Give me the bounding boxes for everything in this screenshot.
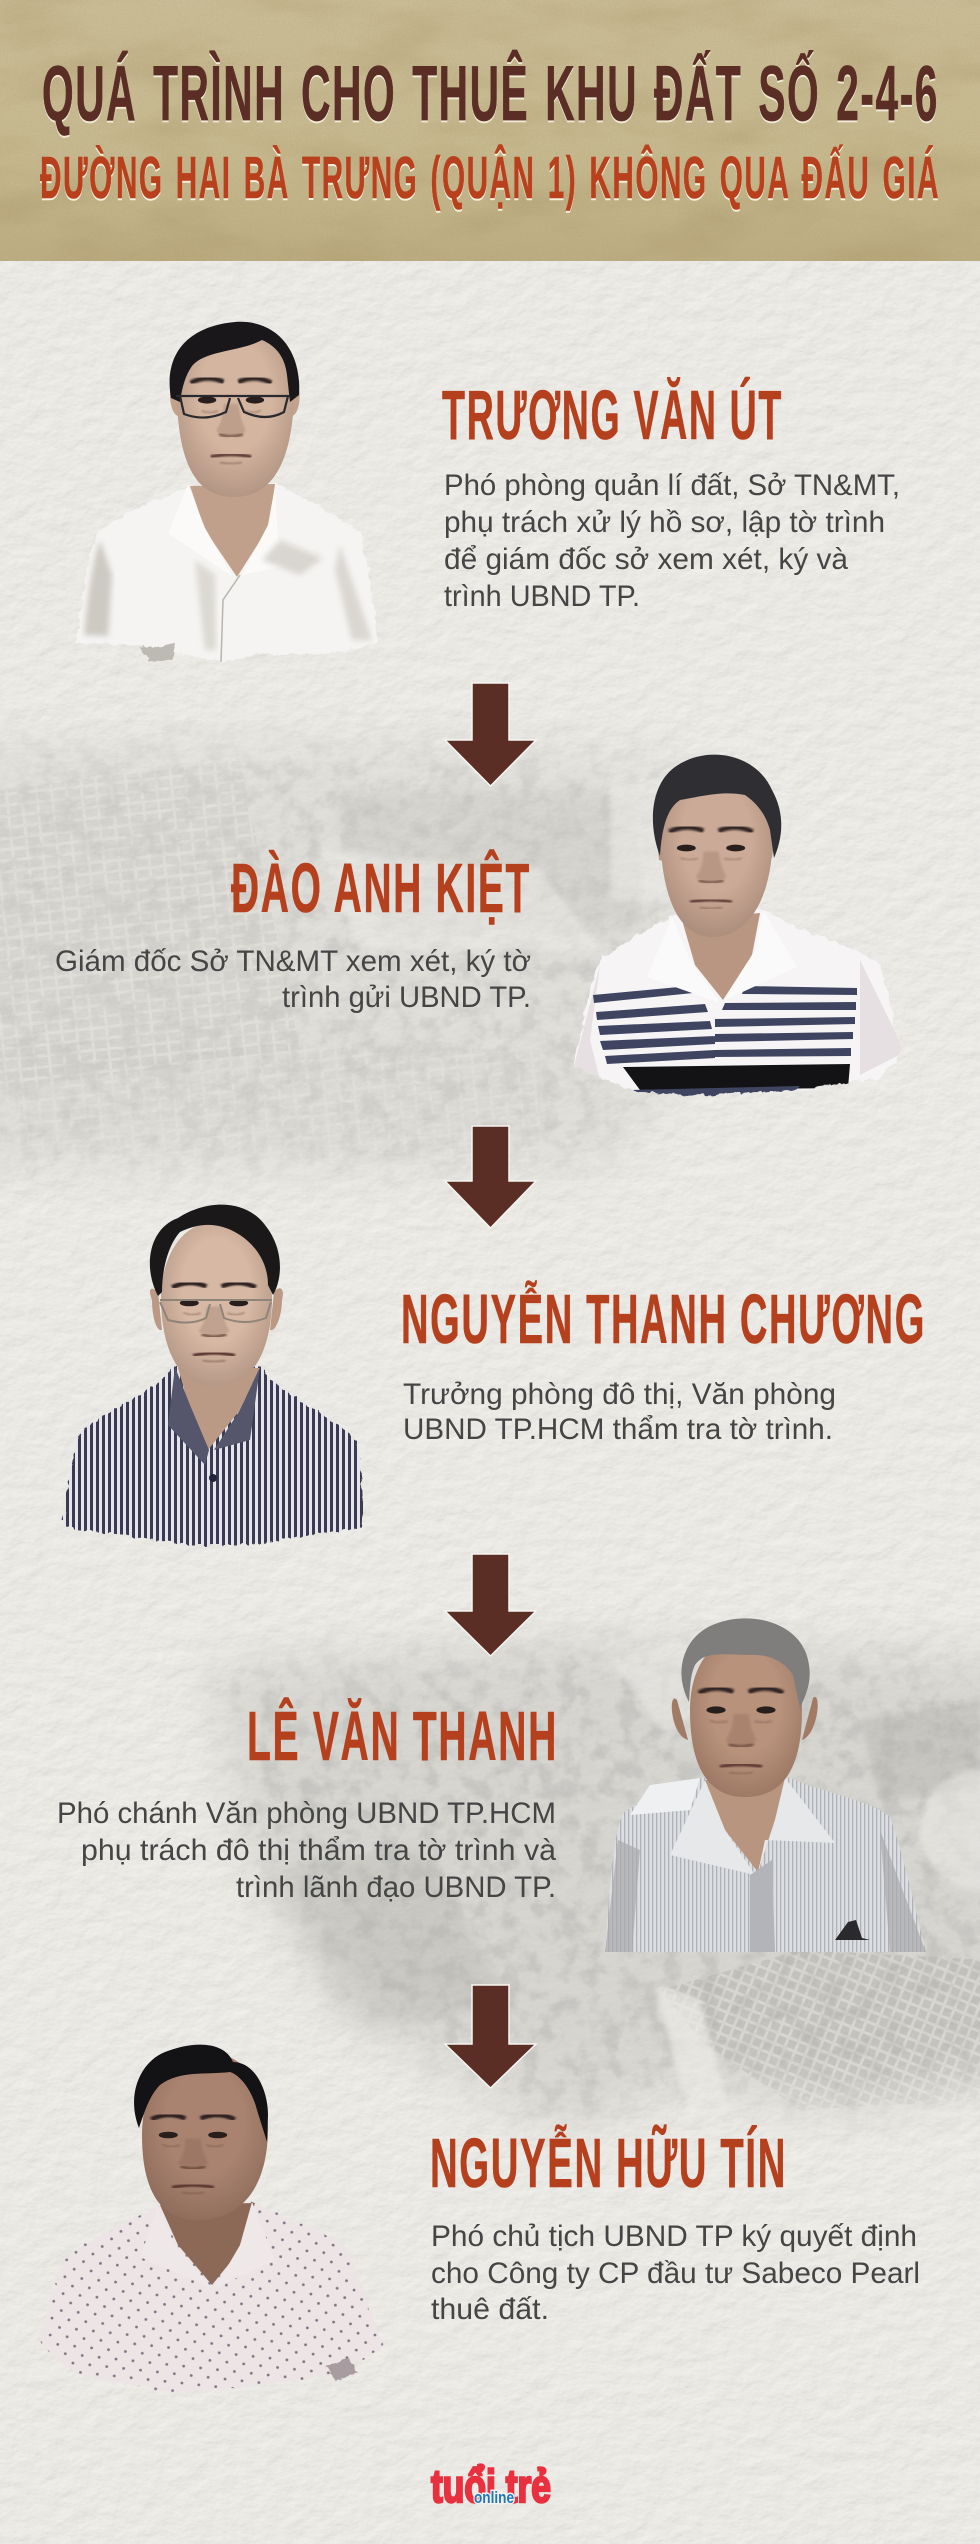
name: ĐÀO ANH KIỆT xyxy=(231,848,531,927)
panel: Nguyễn Hữu Tín xyxy=(30,2045,920,2400)
arrow 1 xyxy=(445,683,536,786)
description: UBND TP.HCM thẩm tra tờ trình. xyxy=(403,1413,833,1446)
description: Phó chánh Văn phòng UBND TP.HCM xyxy=(57,1797,556,1830)
arrow 3 xyxy=(445,1554,536,1656)
header banner xyxy=(0,0,980,261)
portrait 1 xyxy=(77,322,377,662)
description: Trưởng phòng đô thị, Văn phòng xyxy=(403,1378,836,1411)
glasses xyxy=(176,396,290,418)
description: thuê đất. xyxy=(431,2293,549,2326)
portrait 3 xyxy=(55,1205,375,1550)
description: cho Công ty CP đầu tư Sabeco Pearl xyxy=(431,2257,920,2290)
description xyxy=(55,945,531,1014)
description xyxy=(57,1797,556,1904)
logo: Tuổi Trẻ Online: online xyxy=(474,2488,514,2507)
description: phụ trách xử lý hồ sơ, lập tờ trình xyxy=(444,506,885,539)
portrait 5 xyxy=(30,2045,395,2400)
description: trình lãnh đạo UBND TP. xyxy=(236,1871,556,1904)
panel: Lê Văn Thanh xyxy=(57,1618,930,1955)
aerial city background lower xyxy=(150,1620,980,2140)
logo: Tuổi Trẻ Online: tuổi trẻ xyxy=(431,2460,551,2512)
name: LÊ VĂN THANH xyxy=(247,1696,558,1775)
description: trình UBND TP. xyxy=(444,580,640,613)
description: phụ trách đô thị thẩm tra tờ trình và xyxy=(81,1834,556,1867)
arrow 2 xyxy=(445,1126,536,1228)
description: Giám đốc Sở TN&MT xem xét, ký tờ xyxy=(55,945,531,978)
arrow 4 xyxy=(445,1985,536,2088)
description xyxy=(403,1378,836,1446)
description: trình gửi UBND TP. xyxy=(282,981,531,1014)
panel: Đào Anh Kiệt xyxy=(55,755,910,1100)
description xyxy=(444,469,900,613)
panel: Nguyễn Thanh Chương xyxy=(55,1205,926,1550)
panel: Trương Văn Út xyxy=(77,322,900,662)
description: Phó chủ tịch UBND TP ký quyết định xyxy=(431,2220,917,2253)
portrait 2 xyxy=(565,755,910,1100)
description: Phó phòng quản lí đất, Sở TN&MT, xyxy=(444,469,900,502)
aerial city background upper xyxy=(0,732,676,1184)
description: để giám đốc sở xem xét, ký và xyxy=(444,543,848,576)
portrait 4 xyxy=(600,1618,930,1955)
description xyxy=(431,2220,920,2326)
glasses xyxy=(160,1300,272,1323)
